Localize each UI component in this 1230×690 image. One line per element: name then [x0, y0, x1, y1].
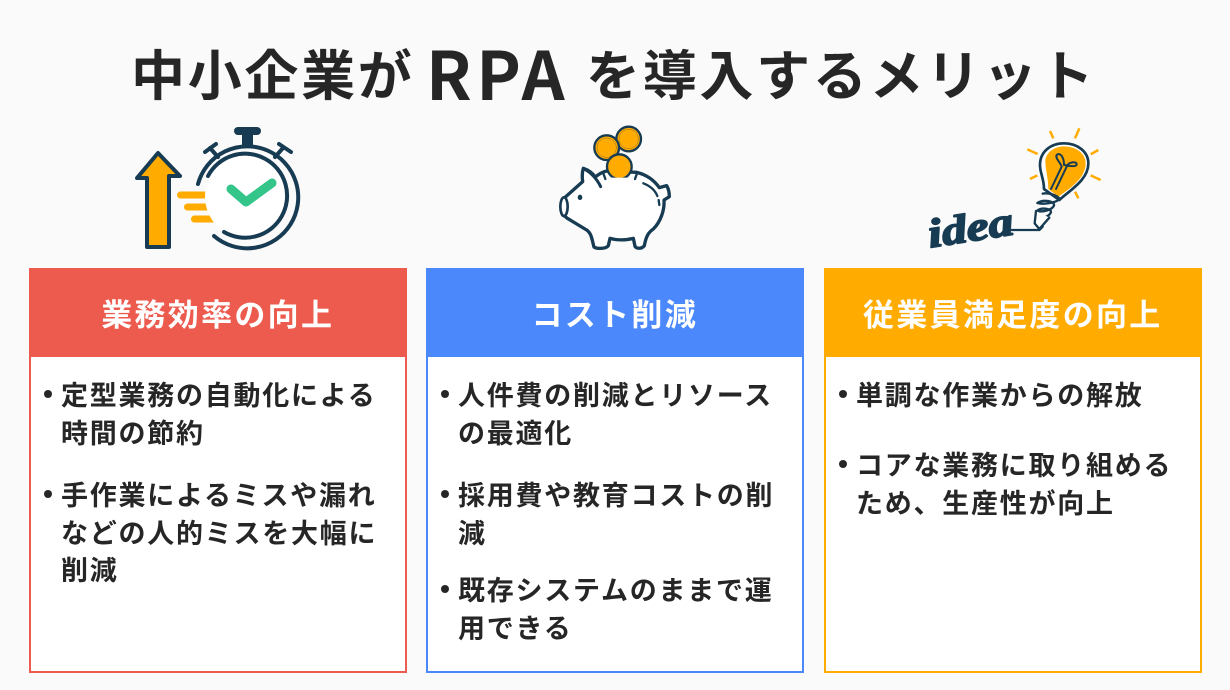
heading: 従業員満足度の向上 — [863, 290, 1163, 335]
stopwatch — [205, 154, 289, 238]
speed lines — [180, 195, 216, 219]
title: を導入するメリット — [586, 32, 1096, 111]
icon: idea light bulb — [924, 128, 1102, 257]
arrow up — [137, 153, 180, 247]
bullet text: 人件費の削減とリソース — [458, 374, 773, 413]
bullet text: コアな業務に取り組める — [856, 444, 1172, 483]
bullet text: 採用費や教育コストの削 — [458, 474, 774, 513]
bullet text: ため、生産性が向上 — [856, 482, 1115, 520]
bullet text: 削減 — [61, 549, 118, 588]
word idea: idea — [924, 199, 1016, 257]
bullet text: 定型業務の自動化による — [61, 374, 376, 413]
panel: コスト削減 — [426, 268, 804, 673]
heading: コスト削減 — [532, 290, 698, 335]
bullet text — [458, 375, 773, 450]
bullet text: 単調な作業からの解放 — [856, 374, 1144, 413]
heading — [824, 268, 1202, 357]
title: 中小企業が — [131, 32, 414, 111]
panel: 業務効率の向上 — [29, 268, 406, 673]
panel: 従業員満足度の向上 — [824, 268, 1202, 673]
bullet text: 手作業によるミスや漏れ — [61, 474, 376, 513]
title — [131, 23, 1096, 120]
bullet text: 用できる — [458, 606, 572, 646]
title: RPA — [426, 23, 569, 120]
bullet text: などの人的ミスを大幅に — [61, 512, 377, 550]
bullet text — [61, 475, 377, 588]
bullet text — [458, 475, 774, 550]
bullet text — [856, 445, 1172, 520]
heading — [29, 268, 406, 357]
bullet text — [458, 570, 773, 645]
bullet text: 時間の節約 — [61, 412, 205, 450]
icon: piggy bank with coins — [559, 126, 671, 250]
bullet text: の最適化 — [458, 412, 573, 450]
icon: stopwatch with upward arrow — [135, 127, 300, 250]
heading: 業務効率の向上 — [101, 290, 334, 335]
bullet text: 既存システムのままで運 — [458, 569, 773, 608]
heading — [426, 268, 804, 357]
bullet text: 減 — [458, 512, 487, 550]
bullet text — [61, 375, 376, 450]
